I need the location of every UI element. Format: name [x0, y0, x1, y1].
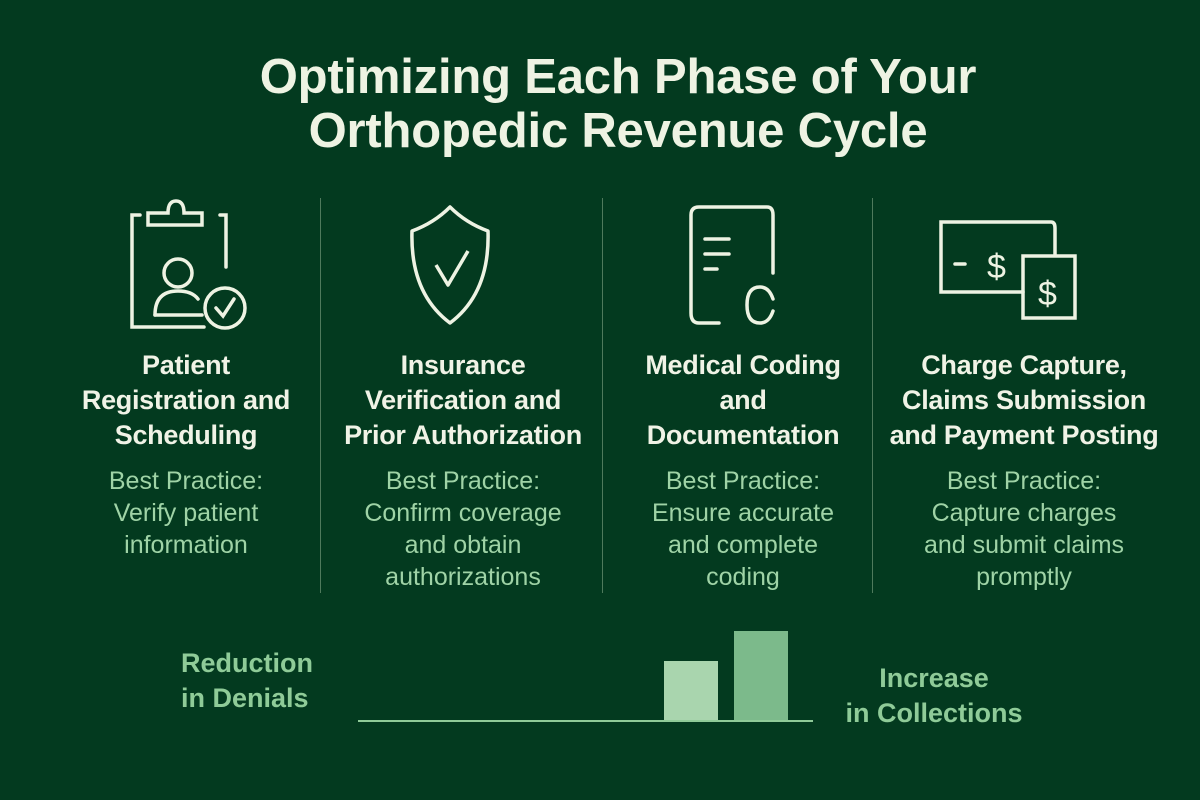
panel: registration: Verify patient: [114, 499, 258, 527]
panel: coding: Ensure accurate: [652, 499, 834, 527]
panel: insurance: Confirm coverage: [364, 499, 562, 527]
panel: charge capture: and Payment Posting: [890, 420, 1158, 450]
panel: coding: Best Practice:: [666, 467, 820, 495]
title: [260, 50, 976, 158]
panel: coding: Documentation: [647, 420, 839, 450]
panel: insurance: [344, 350, 582, 591]
panel: insurance: Prior Authorization: [344, 420, 582, 450]
panel: coding: and complete: [668, 531, 818, 559]
label: increase in collections: [845, 663, 1023, 728]
label: reduction in denials: Reduction: [181, 648, 313, 678]
panel: charge capture: and submit claims: [924, 531, 1124, 559]
panel: registration: Best Practice:: [109, 467, 263, 495]
panel: registration: [82, 350, 290, 559]
icon: clipboard with person: [130, 199, 247, 330]
icon: document with C: [689, 205, 775, 325]
panel: coding: Medical Coding: [645, 350, 841, 380]
panel: registration: Registration and: [82, 385, 290, 415]
bar chart: [358, 631, 813, 722]
panel: coding: coding: [706, 563, 780, 591]
panel: insurance: Insurance: [401, 350, 525, 380]
icon: shield: [410, 205, 490, 325]
panel: charge capture: Capture charges: [932, 499, 1116, 527]
label: increase in collections: in Collections: [845, 698, 1023, 728]
label: reduction in denials: in Denials: [181, 683, 309, 713]
panel: insurance: and obtain: [405, 531, 521, 559]
panel: registration: Patient: [142, 350, 230, 380]
panel: charge capture: Claims Submission: [902, 385, 1146, 415]
panel: charge capture: promptly: [976, 563, 1072, 591]
panel: charge capture: Best Practice:: [947, 467, 1101, 495]
panel: insurance: authorizations: [385, 563, 541, 591]
title: Orthopedic Revenue Cycle: [309, 104, 927, 158]
icon: money: $: [987, 248, 1006, 286]
panel: registration: information: [124, 531, 248, 559]
icon: money: $: [1038, 275, 1057, 313]
panel: insurance: Best Practice:: [386, 467, 540, 495]
label: increase in collections: Increase: [879, 663, 989, 693]
panel: registration: Scheduling: [115, 420, 257, 450]
icon: money: [939, 220, 1077, 320]
panel: charge capture: Charge Capture,: [921, 350, 1127, 380]
panel: coding: and: [719, 385, 767, 415]
panel: charge capture: [890, 350, 1158, 591]
panel: coding: [645, 350, 841, 591]
title: Optimizing Each Phase of Your: [260, 50, 976, 104]
label: reduction in denials: [181, 648, 313, 713]
panel: insurance: Verification and: [365, 385, 561, 415]
